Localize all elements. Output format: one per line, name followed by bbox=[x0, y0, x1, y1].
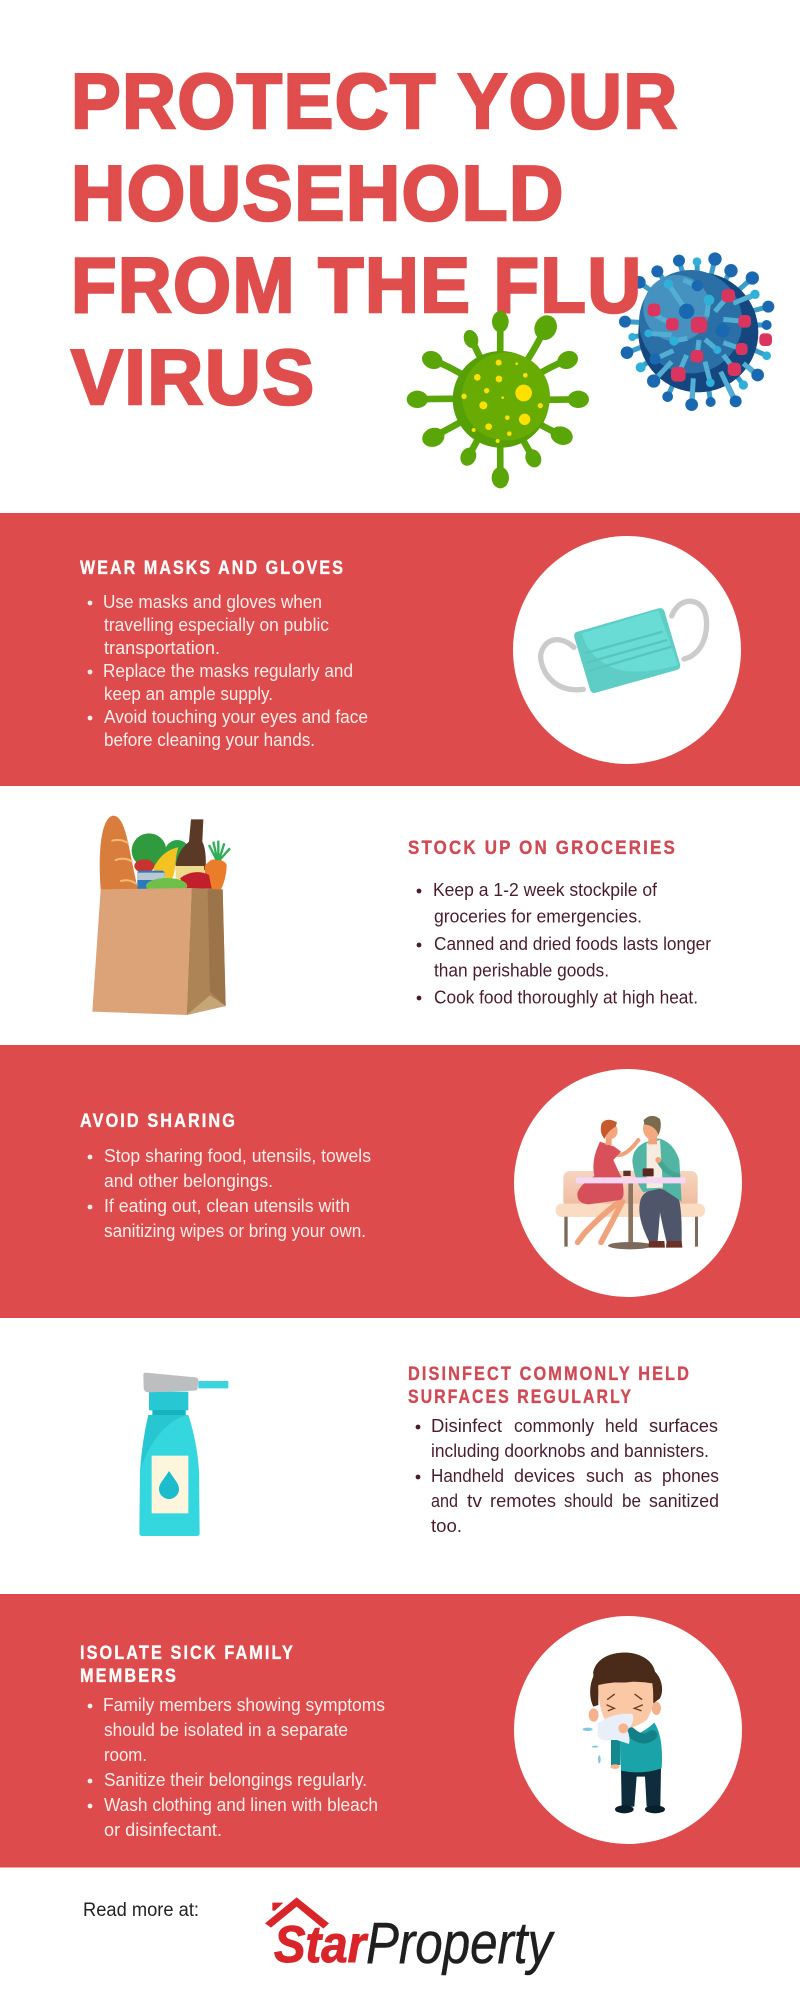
heading: disinfect bbox=[408, 1363, 691, 1408]
bullet list: disinfect: tv bbox=[467, 1491, 482, 1511]
icon: blue virus bbox=[619, 252, 774, 411]
bullet list: isolate: Wash clothing and linen with bleach bbox=[104, 1795, 378, 1815]
bullet list: masks: before cleaning your hands. bbox=[104, 730, 315, 750]
bullet list: sharing: Stop sharing food, utensils, towels bbox=[104, 1146, 371, 1166]
bullet list: disinfect: such bbox=[586, 1466, 624, 1486]
icon: face mask bbox=[541, 601, 707, 693]
bullet list: groceries: Keep a 1-2 week stockpile of bbox=[433, 880, 658, 900]
bullet list: groceries: groceries for emergencies. bbox=[434, 906, 642, 926]
bullet list: disinfect: as bbox=[634, 1466, 652, 1486]
bullet list: masks: Use masks and gloves when bbox=[103, 592, 322, 612]
bullet list: masks bbox=[88, 592, 368, 750]
bullet list: groceries: than perishable goods. bbox=[434, 960, 609, 980]
logo word: Star: Star bbox=[274, 1915, 369, 1974]
title: HOUSEHOLD bbox=[71, 151, 565, 237]
bullet list: disinfect: surfaces bbox=[649, 1416, 718, 1436]
bullet list: isolate: Family members showing symptoms bbox=[103, 1695, 385, 1715]
heading: stock up: STOCK UP ON GROCERIES bbox=[408, 837, 677, 859]
bullet list: disinfect: should bbox=[564, 1491, 613, 1511]
read more label: Read more at: bbox=[83, 1900, 199, 1921]
panel: isolate sick family members bbox=[0, 1594, 800, 1868]
bullet list: disinfect: commonly bbox=[514, 1416, 594, 1436]
heading: avoid sharing: AVOID SHARING bbox=[80, 1110, 237, 1132]
bullet list: disinfect: Handheld bbox=[431, 1466, 504, 1486]
bullet list: groceries: Cook food thoroughly at high heat. bbox=[434, 988, 698, 1008]
heading: isolate bbox=[80, 1642, 295, 1687]
panel: disinfect surfaces bbox=[139, 1363, 719, 1536]
heading: disinfect: SURFACES REGULARLY bbox=[408, 1386, 633, 1408]
bullet list: sharing bbox=[88, 1146, 371, 1241]
panel: stock up on groceries bbox=[92, 816, 711, 1015]
icon: roof bbox=[265, 1897, 329, 1929]
woman bbox=[577, 1120, 638, 1242]
man bbox=[632, 1116, 682, 1248]
bullet list: disinfect: including doorknobs and bannisters. bbox=[431, 1441, 709, 1461]
bullet list: isolate bbox=[88, 1695, 385, 1840]
bullet list: disinfect bbox=[416, 1416, 719, 1536]
icon: sick boy sneezing bbox=[583, 1653, 665, 1813]
heading: disinfect: DISINFECT COMMONLY HELD bbox=[408, 1363, 691, 1385]
bullet list: sharing: and other belongings. bbox=[104, 1171, 273, 1191]
bullet list: masks: Avoid touching your eyes and face bbox=[104, 707, 368, 727]
bullet list: disinfect: phones bbox=[662, 1466, 719, 1486]
title bbox=[71, 58, 679, 421]
title: FROM THE FLU bbox=[71, 242, 643, 329]
title: VIRUS bbox=[71, 335, 316, 421]
logo word: Property: Property bbox=[366, 1911, 555, 1976]
bullet list: masks: keep an ample supply. bbox=[104, 684, 273, 704]
bullet list: isolate: should be isolated in a separate bbox=[104, 1720, 348, 1740]
bullet list: disinfect: devices bbox=[514, 1466, 575, 1486]
bullet list: sharing: If eating out, clean utensils with bbox=[104, 1196, 350, 1216]
bullet list: disinfect: too. bbox=[431, 1516, 462, 1536]
bullet list: isolate: Sanitize their belongings regularly. bbox=[104, 1770, 367, 1790]
heading: isolate: ISOLATE SICK FAMILY bbox=[80, 1642, 295, 1664]
icon: green virus bbox=[407, 311, 589, 488]
bullet list: masks: Replace the masks regularly and bbox=[103, 661, 353, 681]
bullet list: disinfect: be bbox=[622, 1491, 641, 1511]
title: PROTECT YOUR bbox=[71, 58, 679, 145]
heading: wear masks: WEAR MASKS AND GLOVES bbox=[80, 557, 345, 579]
bullet list: sharing: sanitizing wipes or bring your own. bbox=[104, 1221, 366, 1241]
icon: couple at table bbox=[556, 1116, 705, 1249]
bullet list: disinfect: remotes bbox=[490, 1491, 556, 1511]
bullet list: disinfect: sanitized bbox=[649, 1491, 719, 1511]
bullet list: masks: transportation. bbox=[104, 638, 220, 658]
heading: isolate: MEMBERS bbox=[80, 1665, 178, 1687]
bullet list: disinfect: and bbox=[431, 1491, 458, 1511]
bullet list: isolate: room. bbox=[104, 1745, 147, 1765]
icon circle: couple bbox=[514, 1069, 742, 1297]
icon: sanitizer bottle bbox=[139, 1373, 228, 1536]
bullet list: groceries bbox=[417, 880, 711, 1008]
bullet list: disinfect: Disinfect bbox=[431, 1416, 502, 1436]
bullet list: disinfect: held bbox=[605, 1416, 638, 1436]
bullet list: groceries: Canned and dried foods lasts longer bbox=[434, 934, 711, 954]
icon circle: sick person bbox=[514, 1616, 742, 1844]
icon circle: mask bbox=[513, 536, 741, 764]
bullet list: masks: travelling especially on public bbox=[104, 615, 329, 635]
logo: StarProperty bbox=[265, 1897, 555, 1976]
panel: avoid sharing bbox=[0, 1045, 800, 1318]
icon: grocery bag bbox=[92, 816, 230, 1015]
bullet list: isolate: or disinfectant. bbox=[104, 1820, 222, 1840]
panel: wear masks and gloves bbox=[0, 513, 800, 786]
